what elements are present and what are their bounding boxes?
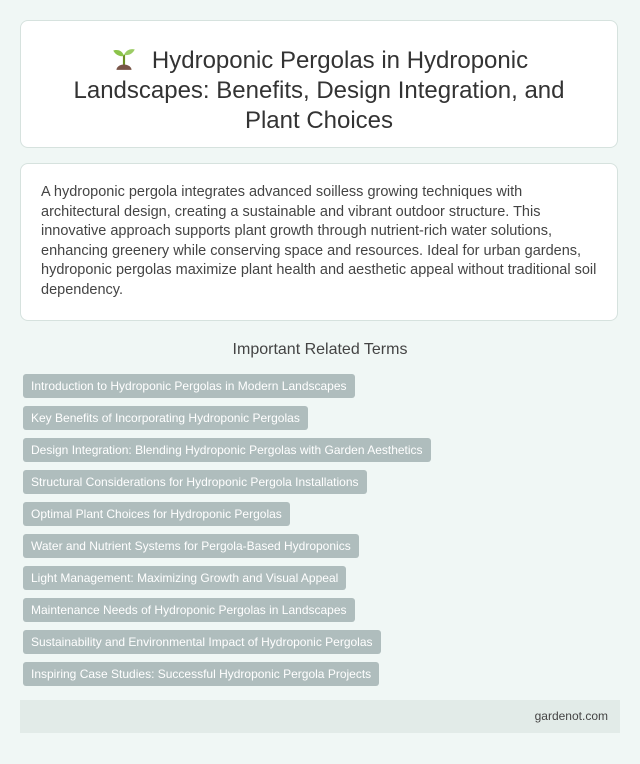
footer: gardenot.com (535, 709, 608, 723)
text: Sustainability and Environmental Impact of Hydroponic Pergolas (31, 635, 373, 649)
footer (20, 700, 620, 733)
icon: sprout (113, 49, 135, 70)
text: Key Benefits of Incorporating Hydroponic Pergolas (31, 411, 300, 425)
text: Inspiring Case Studies: Successful Hydroponic Pergola Projects (31, 667, 371, 681)
text: Design Integration: Blending Hydroponic Pergolas with Garden Aesthetics (31, 443, 423, 457)
title: Hydroponic Pergolas in Hydroponic Landscapes: Benefits, Design Integration, and Plant Choices (74, 47, 564, 134)
text: Water and Nutrient Systems for Pergola-Based Hydroponics (31, 539, 351, 553)
text: Optimal Plant Choices for Hydroponic Pergolas (31, 507, 282, 521)
section heading: Important Related Terms (233, 341, 407, 358)
text: Structural Considerations for Hydroponic Pergola Installations (31, 475, 358, 489)
text: Light Management: Maximizing Growth and Visual Appeal (31, 571, 338, 585)
header card (20, 20, 618, 148)
description card: A hydroponic pergola integrates advanced soilless growing techniques with architectural design, creating a sustainable and vibrant outdoor structure. This innovative approach supports plant growth through nutrient-rich water solutions, enhancing greenery while conserving space and resources. Ideal for urban gardens, hydroponic pergolas maximize plant health and aesthetic appeal without traditional soil dependency. (41, 184, 596, 298)
text: Maintenance Needs of Hydroponic Pergolas in Landscapes (31, 603, 347, 617)
text: Introduction to Hydroponic Pergolas in Modern Landscapes (31, 379, 347, 393)
tags list (23, 374, 431, 686)
description card (20, 163, 618, 321)
